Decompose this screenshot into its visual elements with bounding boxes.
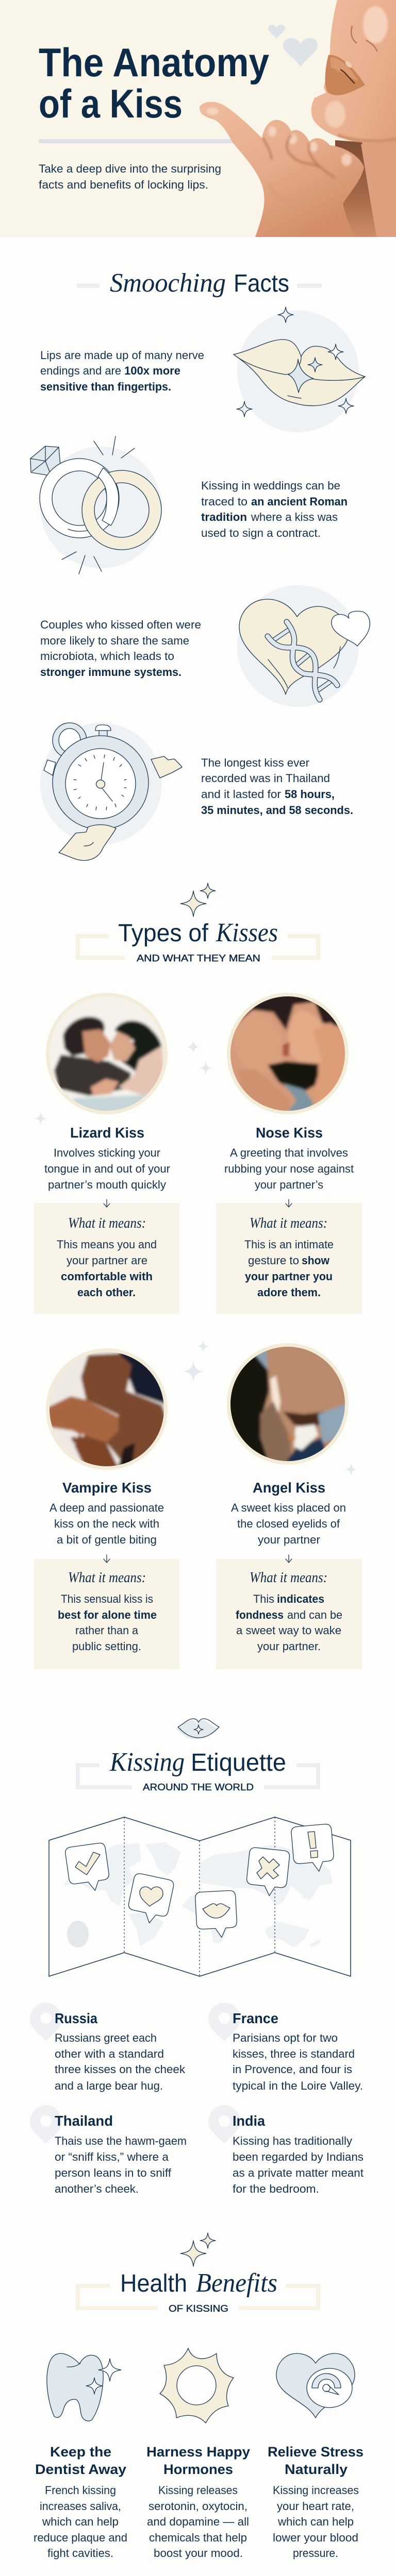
etiquette: india: for the bedroom. [233,2182,319,2195]
text: longest kiss fact: and it lasted for [201,788,281,801]
benefit: keep the dentist away [34,2353,127,2560]
text: Harness Happy [146,2444,250,2460]
text: microbiota fact: microbiota, which leads to [40,650,174,663]
heading: AROUND THE WORLD [143,1782,254,1792]
icon: tooth [47,2353,121,2421]
photo: vampire kiss [46,1348,168,1470]
heading: AND WHAT THEY MEAN [137,953,260,963]
etiquette: thailand: person leans in to sniff [55,2166,172,2179]
photo: nose kiss [227,993,349,1114]
icon: pin [30,2105,62,2144]
text [268,2444,364,2560]
panel: what it means: adore them. [257,1286,321,1299]
icon: lips emblem [176,1719,219,1739]
text: title and description: kiss on the neck with [54,1517,159,1530]
text: Kissing increases [273,2484,359,2497]
text: lower your blood [273,2531,358,2544]
panel: what it means: This means you and [57,1238,157,1251]
photo: face and neck [311,0,396,237]
panel: what it means: gesture to [248,1254,299,1267]
heading [76,2268,320,2314]
panel: what it means: What it means: [250,1569,327,1586]
lips [325,55,365,95]
arrow [104,1555,110,1563]
etiquette: thailand: Thailand [55,2113,113,2129]
icon: hearts [268,25,318,67]
panel: what it means [216,1555,362,1669]
icon: pin [208,2003,240,2041]
bubble: check [64,1842,111,1894]
card: angel kiss [216,1340,362,1669]
bubble: exclamation [291,1824,335,1873]
text [146,2444,250,2560]
text: lips fact: sensitive than fingertips. [40,380,171,393]
arrow [104,1199,110,1207]
text: longest kiss fact: recorded was in Thailand [201,772,330,785]
etiquette: russia: and a large bear hug. [55,2079,163,2092]
etiquette: thailand: another’s cheek. [55,2182,139,2195]
text: title and description [231,1480,346,1546]
bubble: lips [195,1890,238,1939]
panel: what it means: each other. [77,1286,136,1299]
photo: lizard kiss [46,993,168,1114]
text: chemicals that help [149,2531,247,2544]
text: weddings fact: used to sign a contract. [201,527,321,539]
text: title and description: your partner [258,1533,320,1546]
etiquette: russia: three kisses on the cheek [55,2063,186,2076]
text: longest kiss fact: 58 hours, [285,788,335,801]
text: longest kiss fact: The longest kiss ever [201,756,309,769]
title: The Anatomy [39,40,269,85]
text: weddings fact: where a kiss was [251,511,338,523]
panel: what it means [34,1555,179,1669]
panel: what it means: comfortable with [61,1270,153,1283]
icon: sparkles [180,883,216,917]
text: weddings fact: traced to [201,495,248,508]
text: title and description: Lizard Kiss [70,1125,144,1141]
text: which can help [42,2515,119,2528]
etiquette: thailand: or “sniff kiss,” where a [55,2150,169,2163]
text: Dentist Away [35,2462,126,2477]
text: title and description: the closed eyelids of [237,1517,340,1530]
text: longest kiss fact [201,756,353,817]
panel: what it means: best for alone time [58,1608,157,1621]
text: title and description [224,1125,354,1191]
text: weddings fact [201,479,348,539]
heading: Health [120,2270,187,2297]
etiquette: france [208,2003,363,2092]
panel: what it means [216,1199,362,1314]
panel: what it means: and can be [287,1608,342,1621]
etiquette: france: typical in the Loire Valley. [233,2079,363,2092]
panel: what it means: rather than a [75,1624,139,1637]
icon: lips with sparkles [234,307,365,432]
text: reduce plaque and [34,2531,127,2544]
text: which can help [277,2515,354,2528]
text: title and description: Nose Kiss [256,1125,323,1141]
text: Kissing releases [158,2484,238,2497]
text: pressure. [293,2547,338,2560]
icon: wedding rings [30,436,162,574]
text: lips fact: 100x more [124,364,180,377]
text: title and description: partner’s mouth quickly [48,1178,166,1191]
heading: Types of [118,920,209,947]
text: title and description: Angel Kiss [253,1480,325,1496]
text: lips fact: endings and are [40,364,121,377]
etiquette: france: kisses, three is standard [233,2047,355,2060]
etiquette: india: been regarded by Indians [233,2150,364,2163]
benefit: harness happy hormones [146,2348,250,2560]
icon: compass [67,1921,89,1947]
text: microbiota fact: Couples who kissed often were [40,618,201,631]
world map [63,1842,333,1947]
text: title and description: tongue in and out of your [44,1162,170,1175]
decorative sparkles [34,1040,357,1476]
etiquette: india [208,2105,364,2195]
heading: Facts [234,270,289,297]
panel: what it means: a sweet way to wake [236,1624,341,1637]
map with speech bubbles [49,1817,351,1976]
heading: OF KISSING [169,2303,228,2314]
card: nose kiss [216,989,362,1314]
text: longest kiss fact: 35 minutes, and 58 seconds. [201,804,353,817]
bubble: x [245,1847,290,1897]
panel: what it means: your partner you [245,1270,333,1283]
text: weddings fact: tradition [201,511,247,523]
photo: hand blowing a kiss [200,102,364,237]
text: title and description [44,1125,170,1191]
icon: pin [208,2105,240,2144]
card: vampire kiss [34,1345,179,1669]
text [34,2444,127,2560]
etiquette: russia [30,2003,186,2092]
etiquette: india: as a private matter meant [233,2166,364,2179]
text: title and description: Involves sticking your [54,1146,160,1159]
icon: stopwatch with kiss marks [40,723,182,860]
etiquette: russia: Russia [55,2010,97,2026]
text: Hormones [163,2462,233,2477]
heading: Kissing [109,1748,185,1777]
icon: heart with gauge [276,2353,355,2418]
heading: Kisses [216,918,278,947]
text: Naturally [285,2462,348,2477]
panel: what it means: your partner are [67,1254,147,1267]
text: and dopamine — all [147,2515,249,2528]
text: lips fact [40,349,204,393]
heading [76,918,320,963]
icon: pin [30,2003,62,2041]
panel: what it means: What it means: [250,1215,327,1231]
arrow [286,1555,292,1563]
panel: what it means: fondness [236,1608,284,1621]
text: Relieve Stress [268,2444,364,2460]
etiquette: india: India [233,2113,265,2129]
text: your heart rate, [277,2500,354,2513]
panel: what it means: This is an intimate [244,1238,334,1251]
heading: Benefits [196,2268,277,2298]
icon: burst [160,2348,234,2423]
text: microbiota fact: more likely to share the same [40,634,189,647]
panel: what it means: What it means: [68,1569,146,1586]
panel: what it means: What it means: [68,1215,146,1231]
text: title and description: your partner’s [255,1178,323,1191]
text: increases saliva, [40,2500,121,2513]
etiquette: france: Parisians opt for two [233,2031,338,2044]
etiquette: thailand [30,2105,187,2195]
text: fight cavities. [47,2547,113,2560]
benefit: relieve stress naturally [268,2353,364,2560]
subtitle: facts and benefits of locking lips. [39,178,208,191]
icon: heart with dna [237,585,370,707]
subtitle: Take a deep dive into the surprising [39,162,221,175]
icon: sparkles [180,2233,216,2266]
panel: what it means: your partner. [257,1640,321,1653]
section: types of kisses [34,883,362,1669]
panel: what it means: indicates [277,1592,324,1605]
title: of a Kiss [39,81,183,126]
panel: what it means: This sensual kiss is [61,1592,153,1605]
text: boost your mood. [154,2547,243,2560]
text: microbiota fact [40,618,201,679]
text: weddings fact: Kissing in weddings can be [201,479,340,492]
etiquette: russia: other with a standard [55,2047,164,2060]
section: health benefits [34,2233,364,2560]
heading [77,268,322,298]
heading: Smooching [110,268,226,298]
section: smooching facts [30,268,370,860]
text: title and description: a bit of gentle biting [57,1533,157,1546]
heading: Etiquette [191,1749,286,1776]
etiquette: thailand: Thais use the hawm-gaem [55,2134,187,2147]
heading [76,1748,320,1792]
etiquette: france: in Provence, and four is [233,2063,352,2076]
etiquette: france: France [233,2010,278,2026]
etiquette: india: Kissing has traditionally [233,2134,352,2147]
text: serotonin, oxytocin, [148,2500,248,2513]
text: title and description [50,1480,164,1546]
text: Keep the [50,2444,111,2460]
text: title and description: Vampire Kiss [62,1480,152,1496]
etiquette: russia: Russians greet each [55,2031,157,2044]
panel: what it means [34,1199,179,1314]
bubble: heart [126,1873,175,1926]
subtitle [39,162,221,191]
text: title and description: A sweet kiss placed on [231,1501,346,1514]
text: title and description: rubbing your nose against [224,1162,354,1175]
panel: what it means: public setting. [72,1640,141,1653]
panel: what it means: show [302,1254,330,1267]
panel: what it means: This [253,1592,274,1605]
hero banner [0,0,396,237]
photo: angel kiss [227,1343,349,1465]
section: kissing etiquette [30,1719,364,2195]
text: microbiota fact: stronger immune systems. [40,666,182,679]
title [39,40,269,126]
text: French kissing [45,2484,116,2497]
card: lizard kiss [34,989,179,1314]
text: title and description: A greeting that involves [230,1146,348,1159]
text: lips fact: Lips are made up of many nerve [40,349,204,362]
text: title and description: A deep and passionate [50,1501,164,1514]
arrow [286,1199,292,1207]
text: weddings fact: an ancient Roman [251,495,348,508]
